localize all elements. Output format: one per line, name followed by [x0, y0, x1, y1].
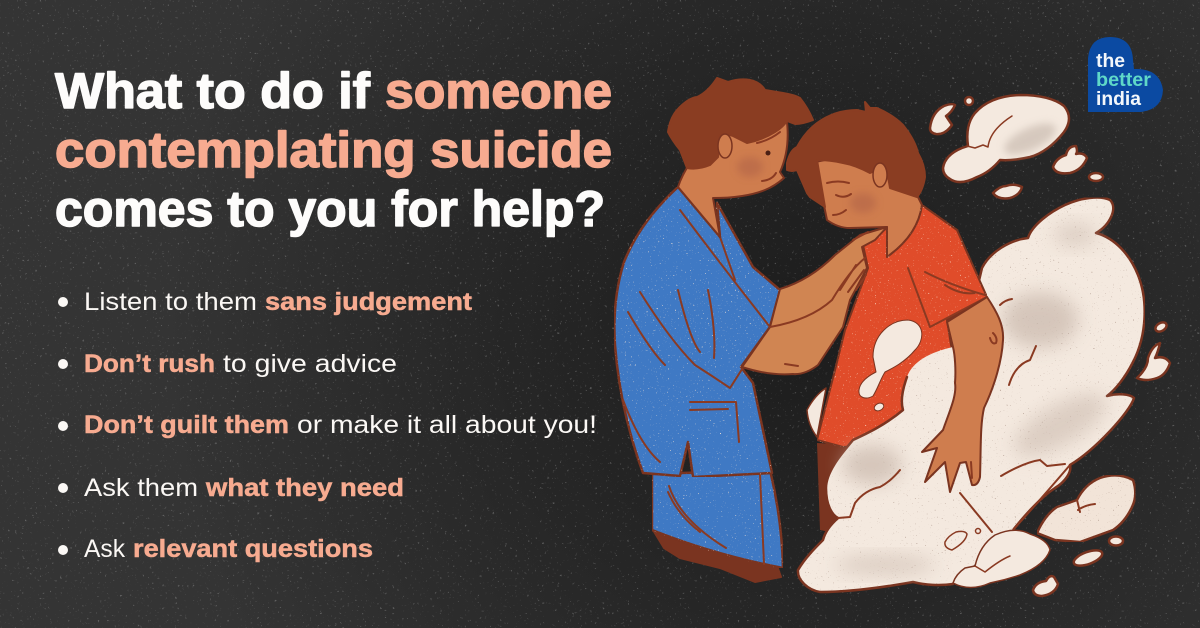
big cloud: back part — [965, 198, 1145, 540]
bullet: relevant questions: relevant questions — [133, 535, 373, 563]
logo: the better india: better — [1096, 70, 1152, 91]
logo: the better india: the — [1096, 51, 1125, 72]
floating clouds right and lower — [1033, 321, 1170, 596]
person 1 blue shirt — [614, 187, 780, 477]
title: What to do if — [55, 63, 370, 119]
floating clouds top — [930, 95, 1103, 198]
title: comes to you for help? — [55, 181, 605, 237]
bullet list — [58, 288, 597, 563]
bullet: what they need: what they need — [205, 474, 404, 502]
bullet: don't guilt them: Don’t guilt them — [84, 411, 289, 439]
bullet: don't rush: Don’t rush — [84, 350, 215, 378]
bullet: sans judgement: Listen to them — [84, 288, 257, 316]
bullet: what they need: Ask them — [84, 474, 198, 502]
big cloud: front part — [798, 223, 1115, 592]
bullet: sans judgement — [58, 288, 473, 316]
bullet: relevant questions: Ask — [84, 535, 125, 563]
person 1 hair and face — [668, 78, 813, 237]
person 1 trousers — [652, 470, 783, 582]
bullet: sans judgement: sans judgement — [265, 288, 473, 316]
logo: the better india: india — [1096, 89, 1141, 110]
bullet: what they need — [58, 474, 404, 502]
title: someone — [385, 63, 612, 119]
bullet: don't rush: to give advice — [223, 350, 397, 378]
title — [55, 63, 612, 237]
bullet: don't rush — [58, 350, 397, 378]
logo: the better india — [1088, 37, 1163, 112]
person 1 arms and hands — [742, 227, 887, 374]
small cloud on red shirt — [807, 320, 922, 437]
bullet: don't guilt them: or make it all about you! — [297, 411, 597, 439]
title: contemplating suicide — [55, 122, 612, 178]
person 2 figure: red shirt, head and hair — [787, 102, 987, 535]
illustration: two people and clouds — [614, 78, 1170, 596]
bullet: don't guilt them — [58, 411, 597, 439]
person 2 arm and hand — [922, 297, 1003, 492]
